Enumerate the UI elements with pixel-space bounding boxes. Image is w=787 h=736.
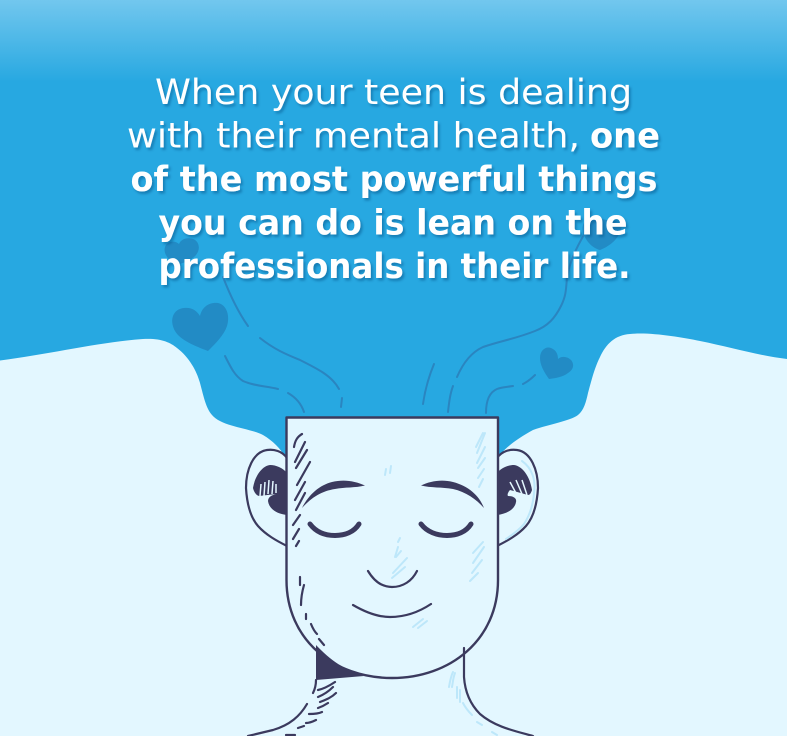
- left closed eye: [310, 524, 359, 536]
- right closed eye: [421, 524, 471, 536]
- title text: professionals in their life.: [158, 247, 630, 287]
- shading cheek: [413, 542, 484, 628]
- icon: right ear: [497, 450, 538, 546]
- shading left forehead: [293, 434, 324, 645]
- icon: large heart: [172, 303, 228, 351]
- shading right forehead: [385, 433, 485, 487]
- icon: heart right: [540, 347, 573, 379]
- head outline: [286, 418, 498, 678]
- neck right line: [464, 648, 533, 736]
- title text: one: [590, 116, 660, 156]
- left eyebrow: [302, 481, 365, 508]
- icon: small heart behind text: [165, 238, 199, 265]
- right eyebrow: [421, 481, 484, 508]
- title text: [127, 73, 660, 287]
- title text: of the most powerful things: [130, 160, 658, 200]
- icon: heart upper right: [582, 218, 622, 250]
- hair strands: [223, 233, 585, 413]
- shading nose: [392, 538, 407, 578]
- neck hatching: [286, 682, 336, 735]
- neck light shading: [449, 672, 497, 735]
- nose: [368, 571, 417, 587]
- title text: When your teen is dealing: [155, 73, 632, 113]
- mouth: [353, 604, 431, 617]
- title text: you can do is lean on the: [158, 204, 628, 244]
- face details: [293, 433, 485, 645]
- pale foreground hair silhouette: [0, 334, 787, 736]
- neck shadow: [316, 645, 364, 680]
- title text: with their mental health,: [127, 116, 580, 156]
- neck: [248, 645, 533, 736]
- icon: left ear: [246, 450, 287, 546]
- neck left line: [248, 680, 316, 736]
- blue background: [0, 0, 787, 460]
